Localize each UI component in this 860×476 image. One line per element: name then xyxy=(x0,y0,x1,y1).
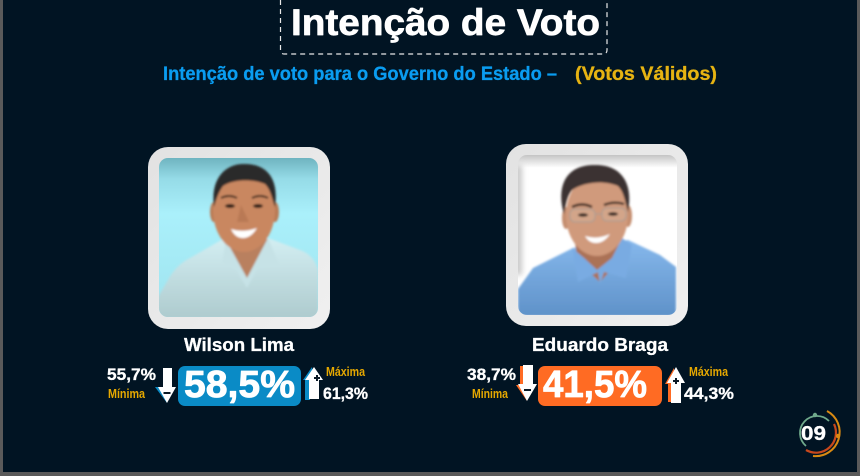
subtitle: (Votos Válidos) xyxy=(575,63,717,85)
value pill: 58,5% xyxy=(184,364,295,406)
candidate panel: Wilson Lima xyxy=(107,147,368,406)
title xyxy=(280,0,607,54)
icon: up arrow xyxy=(303,367,323,400)
candidate name: Eduardo Braga xyxy=(532,334,669,355)
page number badge xyxy=(800,411,840,456)
candidate name: Wilson Lima xyxy=(184,334,295,355)
photo: Eduardo Braga xyxy=(506,144,688,326)
minimum label: Mínima xyxy=(472,387,509,401)
maximum label: Máxima xyxy=(326,365,366,379)
subtitle: Intenção de voto para o Governo do Estado – xyxy=(163,63,557,85)
maximum label: Máxima xyxy=(689,365,729,379)
minimum value: 38,7% xyxy=(467,366,516,384)
title: Intenção de Voto xyxy=(291,2,600,43)
value pill: 41,5% xyxy=(543,364,647,406)
icon: up arrow xyxy=(665,367,685,403)
icon: down arrow xyxy=(516,365,537,401)
minimum value: 55,7% xyxy=(107,366,156,384)
page number badge: 09 xyxy=(801,423,826,445)
photo: Wilson Lima xyxy=(148,147,330,329)
candidate panel: Eduardo Braga xyxy=(467,144,734,406)
minimum label: Mínima xyxy=(108,387,146,401)
icon: down arrow xyxy=(155,368,176,403)
maximum value: 61,3% xyxy=(323,385,368,403)
maximum value: 44,3% xyxy=(684,385,734,403)
